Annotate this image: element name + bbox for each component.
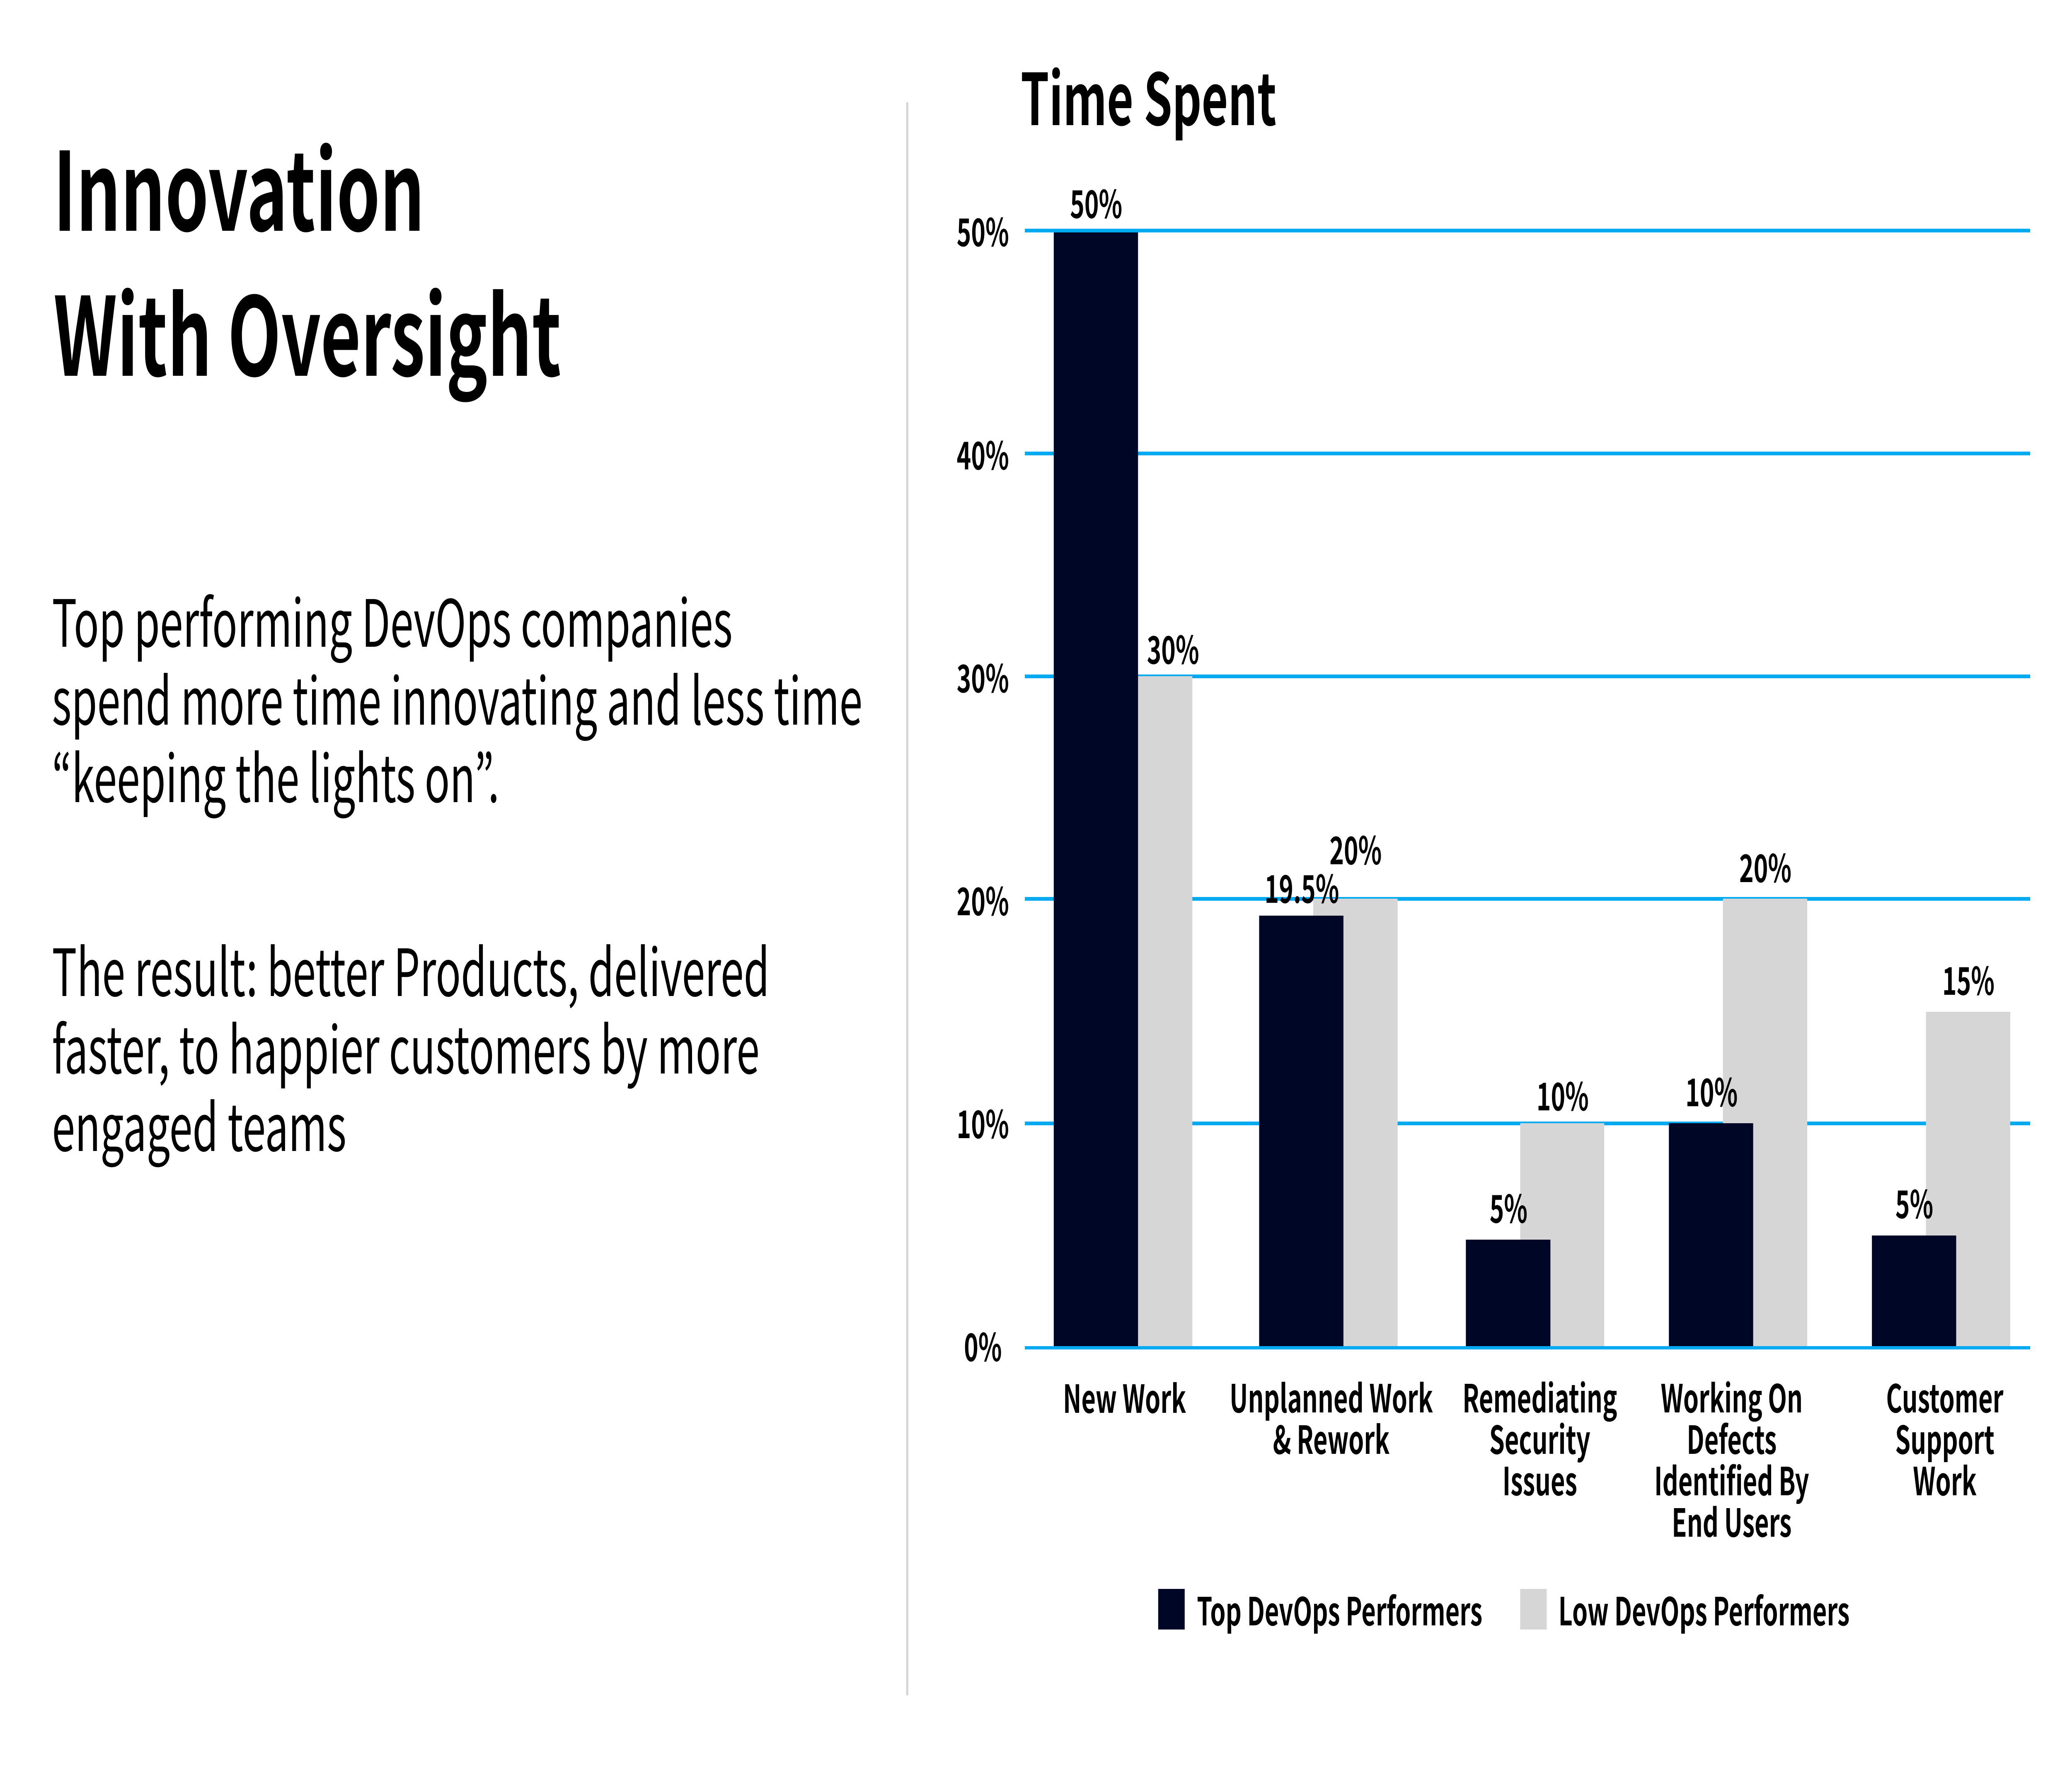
text block: intro paragraph xyxy=(52,571,862,821)
group: Unplanned Work and Rework: 19.5% xyxy=(1265,859,1339,914)
group: Remediating Security Issues: 5% xyxy=(1490,1179,1527,1234)
text block: result paragraph: faster, to happier customers by more xyxy=(52,998,760,1092)
y axis labels xyxy=(957,202,1009,1372)
text block: result paragraph: engaged teams xyxy=(52,1076,346,1170)
text block: result paragraph: The result: better Products, delivered xyxy=(52,921,770,1015)
group: Remediating Security Issues xyxy=(1462,1066,1617,1506)
group: New Work: 50% xyxy=(1070,174,1122,229)
group: Unplanned Work and Rework: & Rework xyxy=(1273,1410,1389,1465)
title xyxy=(53,105,561,407)
group: Remediating Security Issues: 10% xyxy=(1537,1066,1589,1122)
group: Working On Defects Identified By End Users: Working On xyxy=(1661,1368,1803,1424)
bar chart xyxy=(957,174,2030,1548)
title: Innovation xyxy=(53,105,424,262)
title: With Oversight xyxy=(53,250,561,407)
legend: Low DevOps Performers xyxy=(1559,1581,1849,1637)
group: Unplanned Work and Rework: Unplanned Work xyxy=(1230,1368,1433,1424)
group: Remediating Security Issues: Remediating xyxy=(1462,1368,1617,1424)
y axis labels: 50% xyxy=(957,202,1009,257)
group: Working On Defects Identified By End Users: Defects xyxy=(1687,1410,1777,1465)
y axis labels: 0% xyxy=(964,1317,1002,1372)
chart heading: Time Spent xyxy=(1021,43,1276,146)
group: New Work: New Work xyxy=(1063,1368,1186,1424)
group: Remediating Security Issues: Issues xyxy=(1503,1451,1577,1506)
text block: result paragraph xyxy=(52,921,770,1170)
text block: intro paragraph: spend more time innovating and less time xyxy=(52,649,862,743)
group: Working On Defects Identified By End Users xyxy=(1654,838,1809,1548)
group: Unplanned Work and Rework xyxy=(1230,820,1433,1465)
group: Working On Defects Identified By End Users: 10% xyxy=(1685,1062,1738,1117)
group: Working On Defects Identified By End Users: Identified By xyxy=(1654,1451,1809,1506)
group: Customer Support Work: Work xyxy=(1913,1451,1977,1506)
legend xyxy=(1158,1581,1849,1637)
group: New Work xyxy=(1054,174,1199,1424)
group: Working On Defects Identified By End Users: End Users xyxy=(1672,1492,1792,1548)
y axis labels: 10% xyxy=(957,1094,1009,1149)
text block: intro paragraph: Top performing DevOps companies xyxy=(52,571,733,665)
group: Remediating Security Issues: Security xyxy=(1489,1410,1590,1465)
group: Customer Support Work: 15% xyxy=(1942,951,1995,1006)
group: Working On Defects Identified By End Users: 20% xyxy=(1739,838,1791,893)
group: Customer Support Work: 5% xyxy=(1895,1174,1933,1229)
y axis labels: 40% xyxy=(957,426,1009,481)
group: Customer Support Work: Customer xyxy=(1886,1368,2004,1424)
group: New Work: 30% xyxy=(1147,620,1199,675)
group: Customer Support Work: Support xyxy=(1895,1410,1995,1465)
group: Unplanned Work and Rework: 20% xyxy=(1329,820,1382,875)
y axis labels: 30% xyxy=(957,648,1009,704)
group: Customer Support Work xyxy=(1872,951,2010,1506)
text block: intro paragraph: “keeping the lights on”. xyxy=(52,727,499,821)
legend: Top DevOps Performers xyxy=(1197,1581,1482,1637)
y axis labels: 20% xyxy=(957,871,1009,926)
